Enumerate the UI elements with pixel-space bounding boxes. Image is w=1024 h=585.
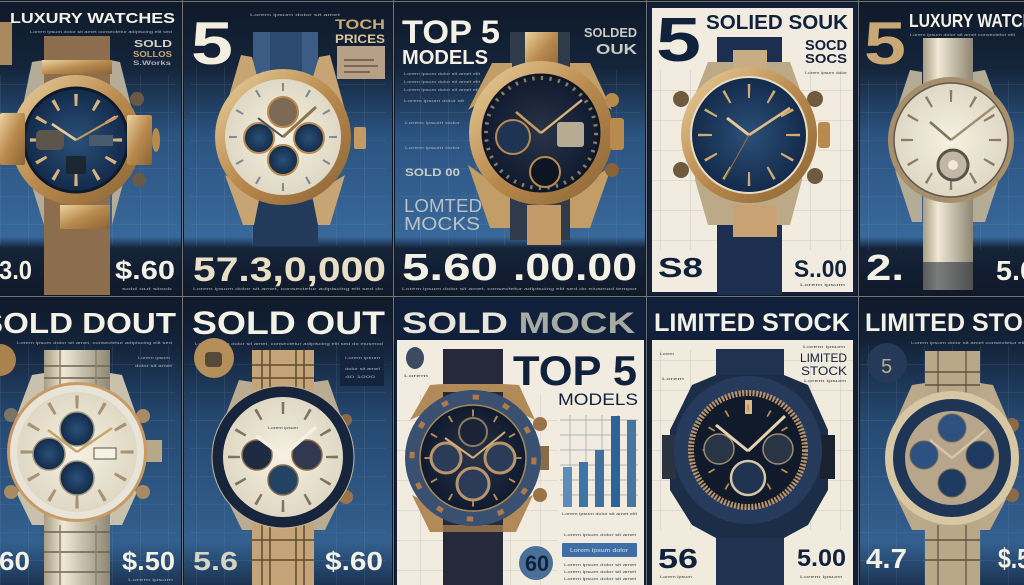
- panel: sold out, navy bezel gold bracelet: [184, 298, 392, 585]
- heading: soled souk: SOLIED SOUK: [706, 12, 849, 34]
- heading: top 5 models: TOP 5: [513, 347, 637, 394]
- note: dolor sit amet: [135, 363, 173, 368]
- panel: sold mock, top 5 models with bar chart: [395, 298, 645, 585]
- price figures: [0, 255, 175, 291]
- price figures: .00.00: [513, 247, 637, 289]
- label: limited stock: Lorem ipsum: [804, 378, 847, 383]
- watch 2: [215, 32, 366, 246]
- bar chart: Lorem ipsum dolor sit amet elit: [562, 511, 638, 516]
- gold badge: [0, 344, 16, 376]
- heading: top 5 models: TOP 5: [402, 14, 500, 50]
- watch 6: [4, 350, 162, 585]
- price figures: [402, 247, 638, 291]
- price figures: 5.60: [402, 247, 498, 289]
- price figures: S..00: [794, 256, 847, 283]
- panel: limited stock, navy watch: [648, 298, 857, 585]
- text block: Lorem ipsum dolor sit amet elit: [404, 79, 481, 84]
- label: price box: PRICES: [335, 32, 385, 46]
- panel: limited stock, tan dial: [860, 298, 1024, 585]
- label: sold and limited: SOLD 00: [405, 167, 460, 179]
- label: solded ouk: OUK: [596, 41, 637, 58]
- price figures: [658, 543, 846, 579]
- partial gold numeral: [0, 22, 12, 65]
- callout button: [562, 532, 637, 581]
- callout button: Lorem ipsum dolor: [570, 548, 628, 554]
- watch 8: [405, 349, 549, 585]
- label: sold stocks: SOCD: [805, 37, 847, 54]
- label: solded ouk: [584, 25, 637, 58]
- note: dolor sit amet: [345, 366, 381, 371]
- price figures: Lorem ipsum: [800, 282, 846, 287]
- price figures: [658, 252, 847, 287]
- callout button: Lorem ipsum dolor sit amet: [564, 576, 637, 581]
- callout button: Lorem ipsum dolor sit amet: [564, 532, 637, 537]
- note: Lorem: [660, 351, 675, 356]
- label: price box: [335, 16, 385, 79]
- label: sold: S.Works: [133, 61, 172, 67]
- caption: Lorem ipsum dolor sit amet, consectetur adipiscing elit sed do eiusmod: [195, 341, 383, 346]
- label: sold: SOLD: [134, 39, 172, 50]
- watch 3: [468, 32, 624, 245]
- text block: Lorem ipsum dolor sit amet elit: [404, 87, 481, 92]
- label: sold stocks: Lorem ipsum dolor: [805, 70, 848, 75]
- price figures: $.50: [122, 546, 175, 576]
- watch 10: [885, 351, 1019, 585]
- text block: Lorem ipsum dolor sit amet elit: [404, 71, 481, 76]
- note: [340, 350, 384, 386]
- callout button: Lorem ipsum dolor sit amet: [564, 569, 637, 574]
- heading: top 5 models: MODELS: [402, 47, 488, 69]
- label: limited stock: LIMITED: [800, 351, 847, 365]
- heading: luxury watches: LUXURY WATCHES: [10, 10, 175, 27]
- price figures: Lorem ipsum: [800, 574, 843, 579]
- price figures: [193, 546, 383, 576]
- note: [135, 355, 173, 368]
- label: limited stock: [800, 344, 847, 383]
- label: sold stocks: [805, 37, 848, 75]
- price figures: [866, 543, 1024, 574]
- panel: cream sheet, blue dial: [648, 3, 857, 295]
- price figure: Lorem ipsum dolor sit amet, consectetur adipiscing elit sed do: [193, 286, 384, 291]
- label: price box: TOCH: [335, 16, 385, 32]
- big number 5: 5: [864, 10, 906, 77]
- price figures: $.60: [325, 546, 383, 576]
- watch 5: [888, 38, 1014, 290]
- bar chart: [560, 415, 638, 516]
- watch 9: [662, 349, 835, 585]
- price figures: 4.7: [866, 543, 907, 574]
- caption: Lorem ipsum dolor sit amet, consectetur adipiscing elit sed: [17, 340, 172, 345]
- number badge: [519, 546, 553, 580]
- number badge: 60: [525, 551, 549, 576]
- heading: sold mock: SOLD MOCK: [402, 307, 635, 340]
- panel: luxury watch, cream dial: [860, 3, 1024, 295]
- price figure: 57.3,0,000: [193, 251, 386, 289]
- label: limited stock: STOCK: [801, 364, 847, 378]
- big number 5: 5: [656, 6, 701, 75]
- price figures: Lorem ipsum: [660, 574, 693, 579]
- label: sold stocks: SOCS: [805, 51, 847, 66]
- panel: top 5 models, dark dial: [395, 3, 645, 295]
- watch 7: [212, 350, 354, 585]
- label: sold and limited: MOCKS: [404, 214, 480, 234]
- panel: sold out, steel chronograph: [0, 298, 181, 585]
- panel: 5 and chronograph on blue strap: [184, 3, 392, 295]
- logo badge: Lorem: [404, 373, 429, 378]
- gold badge: [194, 338, 234, 378]
- watch 1: [0, 36, 160, 295]
- label: sold and limited: LOMTED: [404, 196, 482, 216]
- price figures: [0, 546, 175, 582]
- note: Lorem ipsum: [345, 355, 381, 360]
- label: sold: SOLLOS: [133, 50, 173, 59]
- heading: sold out: SOLD OUT: [192, 305, 386, 341]
- note: Lorem: [662, 376, 685, 381]
- watch 7: Lorem ipsum: [268, 425, 299, 430]
- logo badge: [404, 347, 429, 378]
- number badge: [867, 343, 907, 383]
- label: solded ouk: SOLDED: [584, 25, 637, 40]
- price figures: Lorem ipsum dolor sit amet, consectetur adipiscing elit sed do eiusmod tempor: [402, 286, 638, 291]
- note: [660, 351, 685, 381]
- text block: [404, 71, 481, 150]
- small caption: Lorem ipsum dolor sit amet consectetur adipiscing elit sed: [30, 29, 172, 34]
- price figures: S8: [658, 252, 703, 283]
- heading: top 5 models: MODELS: [558, 390, 638, 409]
- price figures: $.60: [115, 255, 175, 285]
- heading: limited stock: LIMITED STOCK: [654, 309, 850, 337]
- price figures: 3.0: [0, 255, 32, 285]
- price figures: Lorem ipsum: [128, 577, 174, 582]
- label: sold and limited: [404, 167, 482, 234]
- panel: luxury watches, bronze strap: [0, 3, 181, 295]
- text block: Lorem ipsum dolor: [405, 120, 461, 125]
- price figures: 56: [658, 543, 698, 574]
- callout button: Lorem ipsum dolor sit amet: [564, 562, 637, 567]
- heading: top 5 models: [402, 14, 500, 69]
- price figures: sold out stock: [122, 286, 172, 291]
- price figures: [866, 247, 1024, 288]
- caption: Lorem ipsum dolor sit amet: [250, 12, 342, 17]
- price figures: 2.: [866, 247, 904, 288]
- caption: Lorem ipsum dolor sit amet consectetur elit: [911, 340, 1024, 345]
- note: 40 1000: [345, 374, 377, 379]
- caption: Lorem ipsum dolor sit amet consectetur elit: [910, 32, 1016, 37]
- watch 4: [673, 37, 830, 295]
- text block: Lorem ipsum dolor sit: [404, 98, 465, 103]
- text block: Lorem ipsum dolor: [405, 145, 461, 150]
- label: limited stock: Lorem ipsum: [803, 344, 846, 349]
- number badge: 5: [881, 356, 892, 378]
- note: Lorem ipsum: [138, 355, 171, 360]
- big number 5: 5: [191, 10, 233, 77]
- price figures: 5.00: [797, 545, 846, 572]
- price figures: 5.6: [193, 546, 238, 576]
- label: sold: [133, 39, 173, 67]
